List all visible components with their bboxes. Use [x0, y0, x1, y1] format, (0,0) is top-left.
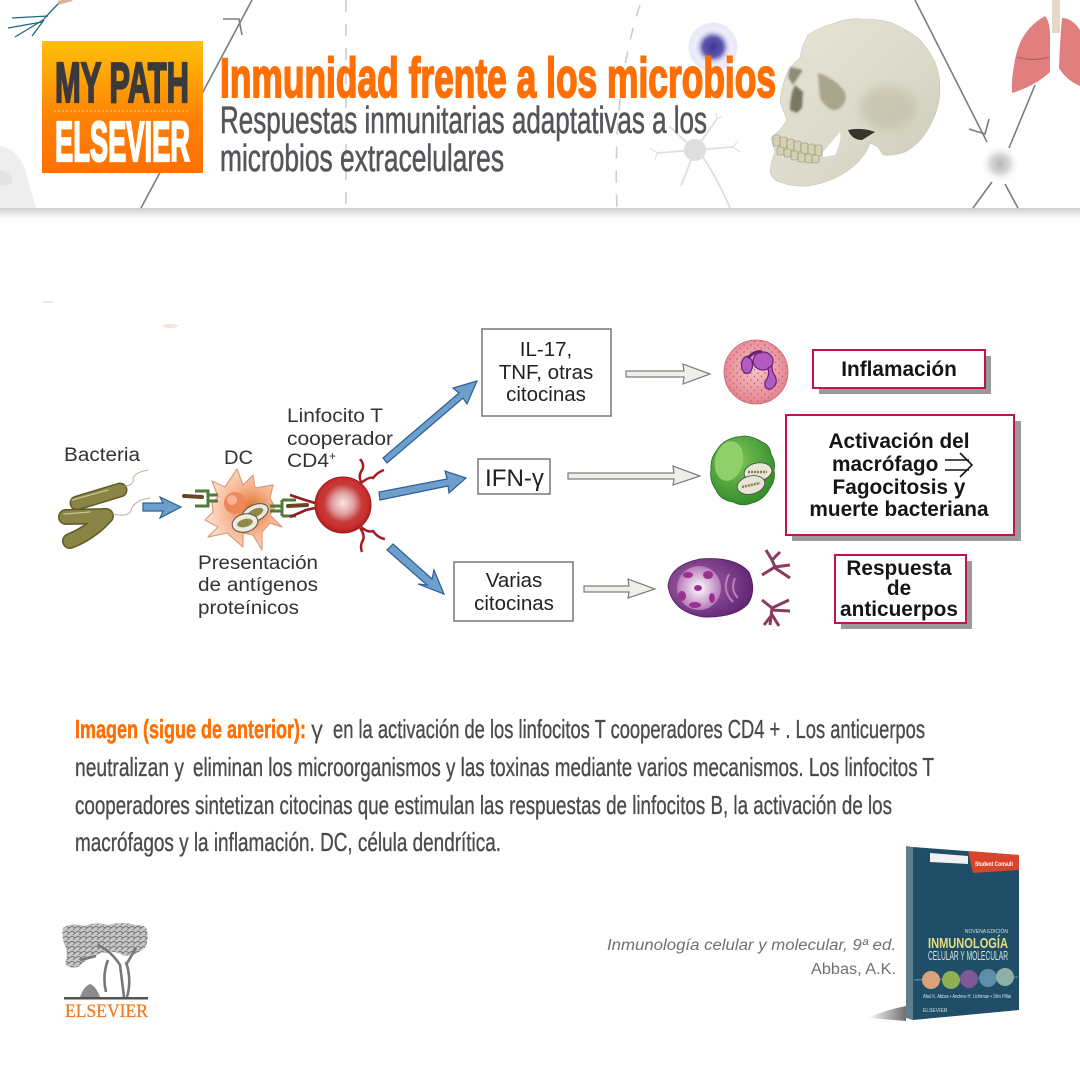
- arrow: to IFN: [379, 471, 466, 500]
- arrow: to varias citocinas: [387, 544, 444, 594]
- label: T helper: cooperador: [287, 429, 394, 450]
- text block: caption: Imagen (sigue de anterior):: [75, 714, 306, 744]
- result: Inflamación: Inflamación: [841, 358, 957, 381]
- box: IL-17: citocinas: [506, 383, 586, 406]
- badge: MY PATH ELSEVIER: [42, 41, 203, 174]
- decorative smudges: [42, 301, 178, 328]
- result: antibody response: [835, 555, 972, 629]
- box: varias citocinas: Varias: [486, 569, 542, 592]
- arrow: bacteria to DC: [143, 497, 181, 518]
- icon: grey cell: [982, 146, 1018, 182]
- icon: blue cell: [688, 22, 738, 72]
- logo: Elsevier: ELSEVIER: [65, 1001, 148, 1022]
- book cover: INMUNOLOGÍA: [928, 935, 1008, 952]
- icon: dendritic cell: [205, 469, 282, 550]
- icon: nerve: [8, 0, 72, 37]
- badge: MY PATH ELSEVIER: ELSEVIER: [55, 110, 190, 174]
- result: antibody response: de: [887, 577, 911, 600]
- box: varias citocinas: [454, 562, 573, 621]
- icon: MHC receptors: [184, 491, 315, 517]
- label: antigen presentation: Presentación: [198, 553, 318, 574]
- label: T helper: Linfocito T: [287, 406, 383, 427]
- arrow: to plasma cell: [584, 579, 655, 598]
- icon: antibodies: [762, 550, 790, 626]
- result: macrophage activation: Activación del: [828, 430, 970, 453]
- box: IFN-gamma: [478, 459, 550, 494]
- result: macrophage activation: Fagocitosis y: [833, 476, 966, 499]
- title: Inmunidad frente a los microbios: [220, 46, 776, 109]
- label: Bacteria: Bacteria: [64, 445, 140, 466]
- badge: MY PATH ELSEVIER: MY PATH: [55, 51, 189, 115]
- icon: lungs: [1012, 0, 1080, 93]
- book cover: ELSEVIER: [923, 1008, 948, 1014]
- logo: Elsevier: [62, 923, 148, 1022]
- citation: Inmunología celular y molecular, 9ª ed.: [607, 937, 896, 954]
- subtitle: Respuestas inmunitarias adaptativas a los: [220, 100, 707, 142]
- icon: bacteria: [64, 470, 150, 541]
- arrow: to macrophage: [568, 466, 700, 485]
- book cover: CELULAR Y MOLECULAR: [928, 948, 1008, 963]
- result: antibody response: Respuesta: [846, 557, 952, 580]
- label: antigen presentation: de antígenos: [198, 575, 318, 596]
- arrow: to IL-17: [383, 381, 477, 463]
- label: T helper: [287, 406, 394, 472]
- icon: neutrophil: [724, 340, 788, 404]
- box: IFN-gamma: IFN-γ: [485, 465, 544, 492]
- icon: tree: [62, 923, 148, 1000]
- label: antigen presentation: proteínicos: [198, 598, 299, 619]
- citation: Abbas, A.K.: [811, 961, 896, 978]
- label: DC: DC: [224, 448, 253, 469]
- citation: [607, 937, 896, 978]
- book cover: NOVENA EDICIÓN: [965, 928, 1008, 935]
- background pathway lines: [141, 0, 1035, 208]
- arrow: to neutrophil: [626, 364, 710, 384]
- icon: faded skull: [0, 146, 36, 208]
- book cover: Abul K. Abbas • Andrew H. Lichtman • Shiv Pillai: [923, 994, 1011, 1000]
- box: IL-17: TNF, otras: [499, 361, 593, 384]
- icon: faded neuron: [650, 113, 740, 208]
- label: T helper: +: [329, 449, 336, 463]
- subtitle: [220, 100, 707, 180]
- icon: macrophage: [711, 436, 775, 505]
- diagram: immune response: [64, 329, 1021, 629]
- icon: skull: [770, 19, 940, 186]
- book cover: [868, 846, 1019, 1021]
- result: macrophage activation: muerte bacteriana: [809, 498, 989, 521]
- result: Inflamación: [813, 350, 991, 394]
- label: antigen presentation: [198, 553, 318, 619]
- label: T helper: CD4: [287, 451, 329, 472]
- text block: caption: γ: [311, 714, 323, 744]
- subtitle: microbios extracelulares: [220, 138, 504, 180]
- icon: CD4 T cell: [315, 459, 385, 552]
- result: macrophage activation: [786, 415, 1021, 541]
- header band: [0, 0, 1080, 219]
- text block: caption: macrófagos y la inflamación. DC, célula dendrítica.: [75, 827, 501, 857]
- box: IL-17: [482, 329, 611, 416]
- box: varias citocinas: citocinas: [474, 592, 554, 615]
- result: antibody response: anticuerpos: [840, 598, 958, 621]
- text block: caption: [75, 714, 934, 857]
- icon: plasma cell: [668, 559, 753, 617]
- text block: caption: neutralizan y: [75, 752, 184, 782]
- box: IL-17: IL-17,: [520, 338, 572, 361]
- book cover: Student Consult: [975, 862, 1013, 868]
- result: macrophage activation: macrófago: [832, 453, 938, 476]
